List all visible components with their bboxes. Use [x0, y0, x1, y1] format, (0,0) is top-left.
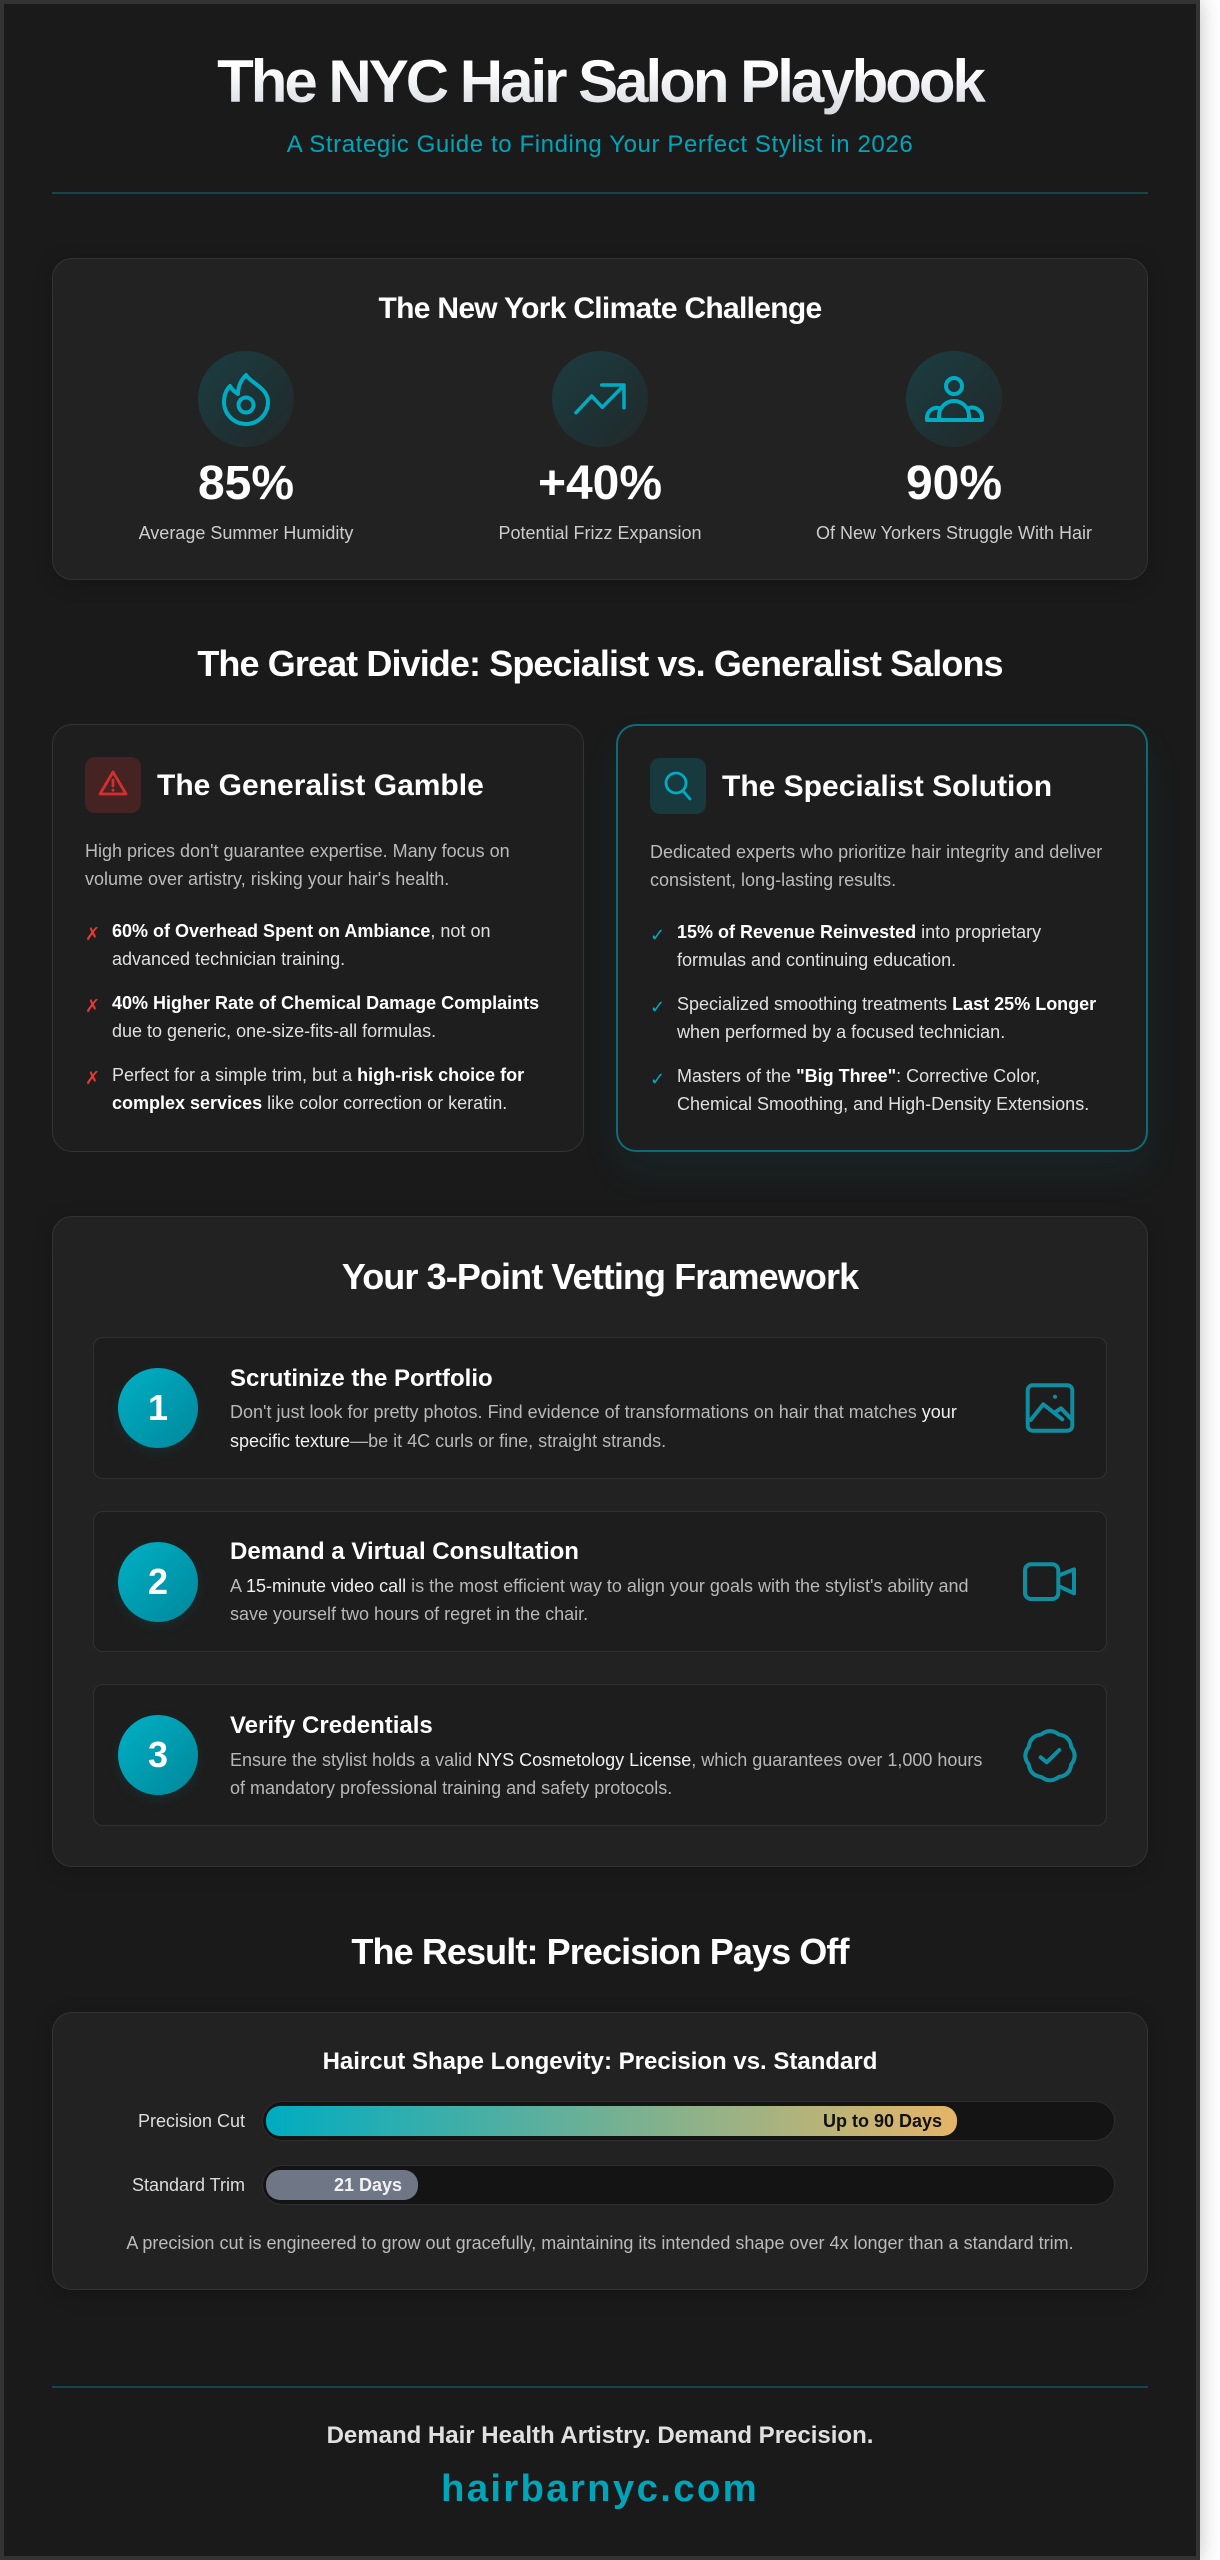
- step text: specific texture—be it 4C curls or fine, straight strands.: [230, 1431, 666, 1451]
- number badge: 3: [148, 1734, 168, 1775]
- stat: struggle: [816, 351, 1092, 543]
- label: Of New Yorkers Struggle With Hair: [816, 523, 1092, 543]
- number badge: 1: [148, 1387, 168, 1428]
- list: ✗: [85, 996, 100, 1017]
- list: due to generic, one-size-fits-all formulas.: [112, 1021, 436, 1041]
- panel: specialist: [616, 724, 1148, 1152]
- fill: up to 90 days: Up to 90 Days: [823, 2111, 942, 2131]
- stat: frizz: [498, 351, 702, 543]
- step title: Demand a Virtual Consultation: [230, 1538, 579, 1565]
- list: Perfect for a simple trim, but a high-risk choice for: [112, 1065, 524, 1085]
- card header: [85, 757, 484, 813]
- value: 90%: [906, 456, 1002, 510]
- panel: longevity chart: [52, 2012, 1148, 2290]
- panel: vetting framework: [52, 1216, 1148, 1867]
- list: ✓: [650, 925, 665, 946]
- step text: save yourself two hours of regret in the chair.: [230, 1604, 588, 1624]
- icon: search: [650, 758, 706, 814]
- chart note: A precision cut is engineered to grow out gracefully, maintaining its intended shape over 4x longer than a standard trim.: [126, 2233, 1074, 2253]
- card title: The Specialist Solution: [722, 770, 1052, 803]
- icon: video camera: [1023, 1562, 1076, 1601]
- list: when performed by a focused technician.: [677, 1022, 1005, 1042]
- panel: climate challenge: [52, 258, 1148, 580]
- number badge: [118, 1715, 198, 1795]
- list: Masters of the "Big Three": Corrective Color,: [677, 1066, 1040, 1086]
- header: [217, 48, 986, 158]
- description: High prices don't guarantee expertise. Many focus on: [85, 841, 510, 861]
- description: [650, 842, 1102, 890]
- heading: great divide: The Great Divide: Specialist vs. Generalist Salons: [197, 642, 1003, 684]
- list: advanced technician training.: [112, 949, 345, 969]
- step text: [230, 1402, 957, 1451]
- step 2: [93, 1511, 1107, 1652]
- list: 60% of Overhead Spent on Ambiance, not on: [112, 921, 490, 941]
- bar: standard trim: [262, 2165, 1115, 2205]
- icon: image: [1026, 1383, 1074, 1433]
- call to action: Demand Hair Health Artistry. Demand Precision.: [327, 2422, 873, 2449]
- fill: 21 days: [266, 2170, 418, 2200]
- list: 15% of Revenue Reinvested into proprietary: [677, 922, 1041, 942]
- footer: [327, 2422, 873, 2510]
- fill: 21 days: 21 Days: [334, 2175, 402, 2195]
- icon: people: [906, 351, 1002, 447]
- website: hairbarnyc.com: [441, 2466, 759, 2510]
- title: [0, 47, 1200, 117]
- list: 40% Higher Rate of Chemical Damage Complaints: [112, 993, 539, 1013]
- step text: of mandatory professional training and safety protocols.: [230, 1778, 672, 1798]
- step title: Verify Credentials: [230, 1712, 433, 1739]
- icon: trending arrow: [552, 351, 648, 447]
- step text: [230, 1576, 968, 1624]
- step text: A 15-minute video call is the most efficient way to align your goals with the stylist's ability and: [230, 1576, 968, 1596]
- icon: flame: [198, 351, 294, 447]
- description: consistent, long-lasting results.: [650, 870, 896, 890]
- step title: Scrutinize the Portfolio: [230, 1365, 493, 1392]
- list: Specialized smoothing treatments Last 25% Longer: [677, 994, 1096, 1014]
- description: volume over artistry, risking your hair's health.: [85, 869, 449, 889]
- panel: generalist: [52, 724, 584, 1152]
- list: complex services like color correction or keratin.: [112, 1093, 507, 1113]
- label: precision cut: Precision Cut: [138, 2111, 245, 2131]
- heading: climate challenge: The New York Climate Challenge: [378, 292, 822, 325]
- chart title: Haircut Shape Longevity: Precision vs. Standard: [323, 2048, 877, 2075]
- list: [85, 921, 539, 1113]
- label: Average Summer Humidity: [139, 523, 353, 543]
- label: Potential Frizz Expansion: [498, 523, 702, 543]
- card header: [650, 758, 1052, 814]
- number badge: [118, 1368, 198, 1448]
- list: ✗: [85, 1068, 100, 1089]
- title: The NYC Hair Salon Playbook: [217, 48, 983, 115]
- list: ✓: [650, 1069, 665, 1090]
- step text: Don't just look for pretty photos. Find evidence of transformations on hair that matches your: [230, 1402, 957, 1422]
- heading: result: The Result: Precision Pays Off: [351, 1930, 849, 1972]
- card title: The Generalist Gamble: [157, 769, 484, 802]
- value: 85%: [198, 456, 294, 510]
- heading: vetting framework: Your 3-Point Vetting Framework: [342, 1256, 858, 1296]
- value: +40%: [538, 456, 662, 510]
- list: formulas and continuing education.: [677, 950, 956, 970]
- number badge: [118, 1542, 198, 1622]
- step text: Ensure the stylist holds a valid NYS Cosmetology License, which guarantees over 1,000 hours: [230, 1750, 982, 1770]
- stat: humidity: [138, 351, 354, 543]
- icon: warning: [85, 757, 141, 813]
- list: ✗: [85, 924, 100, 945]
- description: [85, 841, 510, 889]
- list: ✓: [650, 997, 665, 1018]
- bar: precision cut: [262, 2101, 1115, 2141]
- subtitle: A Strategic Guide to Finding Your Perfect Stylist in 2026: [287, 131, 913, 158]
- step 3: [93, 1684, 1107, 1826]
- list: [650, 922, 1096, 1114]
- step 1: [93, 1337, 1107, 1479]
- icon: verified badge: [1023, 1729, 1077, 1782]
- step text: [230, 1750, 982, 1798]
- fill: up to 90 days: [266, 2106, 957, 2136]
- description: Dedicated experts who prioritize hair integrity and deliver: [650, 842, 1102, 862]
- number badge: 2: [148, 1561, 168, 1602]
- list: Chemical Smoothing, and High-Density Extensions.: [677, 1094, 1089, 1114]
- label: standard trim: Standard Trim: [132, 2175, 245, 2195]
